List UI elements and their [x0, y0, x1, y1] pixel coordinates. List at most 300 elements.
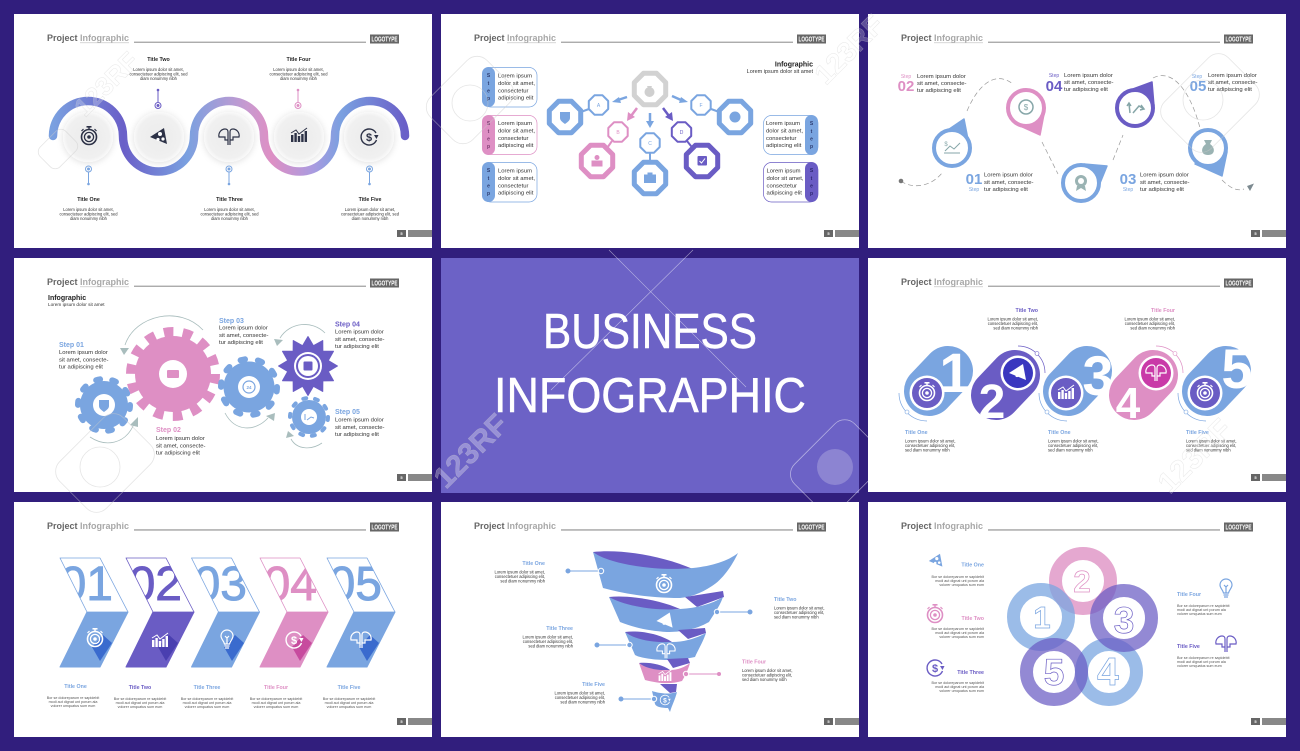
panel: title: [441, 258, 859, 493]
text: title five: volorer umquatus sum eum: [327, 705, 371, 709]
step box 5: Lorem ipsum: [766, 168, 801, 174]
text: title five: Title Five: [1177, 644, 1200, 650]
text: title five: [341, 197, 400, 221]
gear 3: 24: [246, 385, 252, 390]
text: title three: [522, 626, 574, 648]
text: title four: Title Four: [742, 660, 766, 666]
step 01: tur adipiscing elit: [984, 187, 1028, 193]
text: title four: Title Four: [1151, 308, 1175, 314]
panel: pin route: [868, 14, 1286, 248]
text: title four: Lorem ipsum dolor sit amet,: [273, 67, 324, 72]
page number: 5: [400, 719, 403, 724]
text: title one second: consectetuer adipiscing elit,: [1048, 443, 1098, 448]
text: title one: [47, 684, 99, 708]
step 04: Step: [1049, 73, 1059, 79]
text: title four: Title Four: [1177, 592, 1201, 598]
infographic caption: Lorem ipsum dolor sit amet: [48, 302, 105, 307]
text: title three: Title Three: [546, 626, 573, 632]
text: title five: [323, 685, 375, 709]
step 01: 01: [966, 171, 982, 188]
icon: bulb: [1220, 579, 1232, 597]
heading: [474, 33, 793, 43]
text: title three: Title Three: [216, 197, 243, 203]
step box 1: dolor sit amet,: [498, 81, 535, 87]
step box 3: dolor sit amet,: [498, 176, 535, 182]
logotype: LOGOTYPE: [1226, 37, 1252, 44]
step 05: [335, 409, 384, 438]
text: title three: volorer umquatus sum eum: [185, 705, 229, 709]
funnel band 1: [593, 551, 738, 598]
step 05: tur adipiscing elit: [335, 432, 379, 438]
text: title one: sed diam nonummy nibh: [905, 448, 950, 452]
step box 3: consectetur: [498, 184, 528, 190]
step 01: tur adipiscing elit: [59, 364, 103, 370]
logotype: [797, 34, 826, 44]
heading: Project: [474, 33, 505, 43]
panel: wave timeline: [14, 14, 432, 248]
step 02: sit amet, consecte-: [917, 81, 966, 87]
infographic caption: Infographic: [775, 62, 813, 68]
text: title one: diam nonummy nibh: [70, 216, 108, 221]
text: title one: sed diam nonummy nibh: [500, 578, 546, 584]
step box 3: p: [487, 191, 490, 197]
text: title two: Title Two: [962, 616, 985, 622]
text: title five: Bor se doloreparum re sapidebit: [323, 697, 375, 701]
step 01: sit amet, consecte-: [984, 180, 1033, 186]
step 03: Lorem ipsum dolor: [1140, 172, 1189, 178]
step 03: tur adipiscing elit: [1140, 187, 1184, 193]
heading: Infographic: [507, 521, 556, 531]
heading: Infographic: [80, 521, 129, 531]
text: title one: Title One: [905, 430, 928, 436]
capsule 4: [1116, 346, 1183, 428]
step box 5: consectetur: [766, 184, 797, 190]
heading: Infographic: [934, 33, 983, 43]
page number: 5: [1254, 475, 1257, 480]
text: title one: consectetuer adipiscing elit,: [905, 443, 955, 448]
page number: [1251, 230, 1286, 237]
page number: [824, 230, 859, 237]
text: title one: Title One: [77, 197, 100, 203]
ring 4: 4: [1097, 651, 1119, 694]
step box 3: e: [487, 184, 490, 190]
step box 2: e: [487, 136, 490, 142]
step 04: 04: [1046, 78, 1063, 95]
text: title three: volorer umquatus sum eum: [939, 689, 984, 693]
step box 1: adipiscing elit: [498, 96, 534, 102]
step 02: Lorem ipsum dolor: [156, 436, 205, 442]
step 02: sit amet, consecte-: [156, 444, 205, 450]
step box 5: S: [810, 168, 814, 174]
step 01: Lorem ipsum dolor: [984, 172, 1033, 178]
step 01: Lorem ipsum dolor: [59, 350, 108, 356]
icon: dollar: [361, 129, 378, 145]
capsule 3: [1039, 344, 1114, 421]
page number: [397, 474, 432, 481]
step 04: Lorem ipsum dolor: [1064, 73, 1113, 79]
pin 1: $: [944, 142, 948, 148]
connectors: [566, 568, 752, 702]
text: title one: Title One: [522, 561, 545, 567]
text: title five: consectetuer adipiscing elit,: [555, 695, 605, 700]
ring 5: 5: [1044, 652, 1064, 693]
icon: triangle: [929, 554, 942, 567]
funnel band 3: [625, 628, 706, 660]
node C: [634, 133, 666, 194]
capsule 2: 2: [979, 376, 1005, 429]
panel: rings: [868, 502, 1286, 737]
step box 3: S: [487, 168, 491, 174]
step 04: Lorem ipsum dolor: [335, 330, 384, 336]
step box 2: adipiscing elit: [498, 143, 534, 149]
icon: triangle: [150, 128, 167, 144]
step box 3: adipiscing elit: [498, 190, 534, 196]
heading: [474, 521, 793, 531]
text: title five: consectetuer adipiscing elit,: [1186, 443, 1236, 448]
node A: [549, 95, 608, 133]
logotype: LOGOTYPE: [798, 525, 825, 532]
text: title one second: sed diam nonummy nibh: [1048, 448, 1093, 452]
step 05: tur adipiscing elit: [1208, 87, 1252, 93]
text: title four: consectetuer adipiscing elit,: [1125, 321, 1175, 326]
step box 4: e: [810, 136, 813, 142]
text: title three: sed diam nonummy nibh: [528, 644, 574, 648]
capsule 2: [979, 346, 1045, 429]
step 04: [335, 322, 384, 350]
title: INFOGRAPHIC: [494, 369, 806, 423]
text: title one second: [1048, 430, 1099, 452]
step box 4: t: [811, 129, 813, 135]
text: title two: Title Two: [774, 597, 797, 603]
text: title one: volorer umquatus sum eum: [939, 583, 984, 587]
text: title two: modi aut dignat unt porum ala: [935, 631, 985, 635]
step 05: [1190, 73, 1257, 95]
text: title five: [1177, 644, 1229, 668]
page number: [397, 718, 432, 725]
panel: funnel: [441, 502, 859, 737]
step 03: tur adipiscing elit: [219, 340, 263, 346]
step 02: 02: [898, 78, 914, 95]
icon: bars: [291, 128, 307, 142]
text: title two: [114, 685, 166, 709]
text: title four: Title Four: [264, 685, 288, 691]
step 01: [966, 171, 1033, 193]
text: title four: consectetuer adipiscing elit,: [742, 672, 792, 678]
text: title five: Title Five: [338, 685, 360, 691]
step 05: 05: [1190, 78, 1206, 95]
pin 2: [1008, 90, 1044, 135]
icon: heads: [1216, 636, 1236, 652]
gear 5: [290, 398, 328, 436]
heading: Project: [47, 521, 78, 531]
step 02: Step 02: [156, 427, 181, 434]
text: title two: sed diam nonummy nibh: [993, 326, 1039, 330]
text: title two: sed diam nonummy nibh: [774, 614, 819, 620]
text: title four: [1177, 592, 1229, 616]
text: title three: modi aut dignat unt porum ala: [183, 701, 232, 705]
icon: heads: [219, 129, 239, 145]
node F: [691, 95, 751, 133]
logotype: [797, 522, 826, 532]
text: title four: sed diam nonummy nibh: [742, 677, 787, 682]
ring 2: 2: [1073, 564, 1091, 599]
heading: Project: [901, 277, 932, 287]
text: title two: consectetuer adipiscing elit,: [774, 610, 824, 615]
text: title one second: Title One: [1048, 430, 1071, 436]
icon: dollar: $: [932, 663, 938, 675]
step 05: Step: [1192, 74, 1202, 80]
route start dot: [899, 179, 903, 183]
step 01: Step 01: [59, 342, 84, 349]
text: title two: volorer umquatus sum eum: [118, 705, 162, 709]
text: title two: Lorem ipsum dolor sit amet,: [987, 316, 1038, 322]
step box 1: [482, 67, 537, 107]
page number: 5: [1254, 719, 1257, 724]
text: title four: sed diam nonummy nibh: [1130, 326, 1176, 330]
step box 2: t: [488, 129, 490, 135]
gear 1: [78, 379, 130, 431]
logotype: LOGOTYPE: [372, 37, 398, 44]
text: title two: [932, 616, 985, 639]
rotation arrows: [90, 316, 325, 448]
chevron 01: 01: [60, 558, 113, 611]
node C: C: [648, 141, 652, 147]
pin 2: $: [1024, 103, 1029, 112]
chevron 03: [192, 558, 260, 667]
step box 5: dolor sit amet,: [766, 176, 804, 182]
text: title one: Title One: [64, 684, 87, 690]
text: title three: [200, 197, 259, 221]
text: title three: Title Three: [957, 670, 984, 676]
text: title five: sed diam nonummy nibh: [1186, 448, 1231, 452]
icon discs: [63, 112, 394, 162]
ring 4: [1082, 644, 1136, 700]
logotype: LOGOTYPE: [1226, 281, 1252, 288]
text: title one: Bor se doloreparum re sapidebit: [47, 696, 99, 700]
title: BUSINESS: [543, 305, 757, 359]
text: title three: Lorem ipsum dolor sit amet,: [204, 207, 255, 212]
text: title one: consectetuer adipiscing elit, sed: [59, 212, 118, 216]
text: title five: volorer umquatus sum eum: [1177, 664, 1222, 668]
step 03: 03: [1120, 171, 1136, 188]
text: title three: diam nonummy nibh: [211, 216, 249, 221]
text: title one: [494, 561, 546, 584]
gear 2: [131, 332, 215, 416]
step box 2: [482, 115, 537, 155]
node F: F: [699, 103, 703, 109]
page number: 5: [400, 475, 403, 480]
heading: [47, 33, 366, 43]
step box 5: adipiscing elit: [766, 190, 802, 196]
logotype: [1224, 278, 1253, 288]
text: title five: Title Five: [1186, 430, 1209, 436]
step box 4: S: [810, 121, 814, 127]
page number: 5: [827, 719, 830, 724]
step box 3: [482, 162, 537, 202]
chevron 01: [60, 558, 128, 667]
text: title four: Lorem ipsum dolor sit amet,: [742, 668, 793, 673]
panel: capsules: [868, 258, 1286, 492]
gear 4: [278, 336, 338, 396]
text: title four: Title Four: [286, 57, 311, 63]
text: title four: [742, 660, 793, 682]
text: title two: [774, 597, 825, 620]
ring 5: [1026, 644, 1082, 700]
icon: dollar: $: [366, 132, 372, 144]
panel: gears: [14, 258, 432, 492]
text: title four: [1124, 308, 1176, 330]
text: title one: modi aut dignat unt porum ala: [935, 579, 985, 583]
text: title three: consectetuer adipiscing elit, sed: [200, 212, 259, 216]
watermark: 123RF: [808, 9, 890, 90]
step 05: Step 05: [335, 409, 360, 416]
infographic caption: Lorem ipsum dolor sit amet: [747, 69, 813, 75]
step 03: sit amet, consecte-: [219, 333, 268, 339]
infographic caption: [48, 295, 105, 307]
ring 3: 3: [1114, 600, 1134, 641]
logotype: [370, 278, 399, 288]
heading: Project: [47, 277, 78, 287]
text: title three: [932, 670, 985, 693]
text: title two: consectetuer adipiscing elit,: [988, 321, 1038, 326]
text: title three: Bor se doloreparum re sapidebit: [181, 697, 233, 701]
text: title four: volorer umquatus sum eum: [254, 705, 298, 709]
step box 5: p: [810, 191, 813, 197]
funnel band 4: [639, 658, 690, 683]
text: title one: [932, 562, 985, 587]
dashed route: [901, 76, 1244, 190]
icon: dollar: [927, 660, 944, 676]
text: title one: Lorem ipsum dolor sit amet,: [494, 570, 545, 574]
text: title two: Lorem ipsum dolor sit amet,: [774, 606, 825, 610]
step box 2: S: [487, 121, 491, 127]
text: title two: Title Two: [129, 685, 152, 691]
heading: [47, 277, 366, 287]
step 02: [156, 427, 205, 456]
heading: [47, 521, 366, 531]
pin 5: [1190, 130, 1227, 176]
page number: 5: [1254, 231, 1257, 236]
ring 1: 1: [1033, 600, 1051, 635]
icon: stopwatch: [82, 126, 96, 144]
heading: Project: [901, 33, 932, 43]
step 05: Lorem ipsum dolor: [335, 418, 384, 424]
heading: Infographic: [934, 277, 983, 287]
step 04: [1046, 73, 1113, 95]
watermark: 123RF: [428, 408, 515, 495]
text: title one second: Lorem ipsum dolor sit amet,: [1048, 438, 1099, 444]
node B: [581, 122, 628, 177]
text: title four: modi aut dignat unt porum ala: [1177, 608, 1227, 612]
step box 5: e: [810, 184, 813, 190]
text: title one: Title One: [961, 562, 984, 568]
watermark: 123RF: [68, 46, 144, 122]
chevron 04: $: [291, 635, 297, 647]
text: title two: Bor se doloreparum re sapidebit: [114, 697, 166, 701]
text: title two: diam nonummy nibh: [140, 76, 178, 81]
chevron 02: 02: [129, 558, 182, 611]
text: title one: Lorem ipsum dolor sit amet,: [905, 438, 956, 444]
step 02: Lorem ipsum dolor: [917, 74, 966, 80]
text: title three: Title Three: [194, 685, 220, 691]
step 04: tur adipiscing elit: [1064, 87, 1108, 93]
capsule 3: 3: [1082, 344, 1114, 407]
text: title four: modi aut dignat unt porum ala: [252, 701, 301, 705]
route end arrow: [1247, 184, 1254, 191]
heading: [901, 33, 1220, 43]
step 04: tur adipiscing elit: [335, 344, 379, 350]
page number: [397, 230, 432, 237]
step box 2: Lorem ipsum: [498, 121, 532, 127]
text: title two: Bor se doloreparum re sapidebit: [932, 627, 984, 631]
text: title five: Title Five: [582, 682, 605, 688]
text: title four: Bor se doloreparum re sapidebit: [250, 697, 302, 701]
text: title four: Lorem ipsum dolor sit amet,: [1124, 316, 1175, 322]
icon: centre money bag octagon: [634, 73, 666, 105]
text: title one: consectetuer adipiscing elit,: [495, 574, 545, 579]
step 05: sit amet, consecte-: [1208, 80, 1257, 86]
text: title five: Title Five: [359, 197, 381, 203]
heading: Infographic: [80, 277, 129, 287]
capsule 4: 4: [1116, 379, 1141, 428]
heading: Infographic: [507, 33, 556, 43]
arrowheads: [120, 339, 294, 438]
page number: [1251, 474, 1286, 481]
text: title two: consectetuer adipiscing elit, sed: [129, 72, 188, 76]
text: title four: diam nonummy nibh: [280, 76, 318, 81]
panel: chevrons: [14, 502, 432, 737]
text: title four: consectetuer adipiscing elit, sed: [269, 72, 328, 76]
capsule 5: [1178, 337, 1253, 421]
heading: Infographic: [80, 33, 129, 43]
step 02: Step: [901, 74, 911, 80]
node D: [672, 122, 718, 177]
text: title five: sed diam nonummy nibh: [560, 700, 606, 704]
step 02: tur adipiscing elit: [156, 450, 200, 456]
page number: [824, 718, 859, 725]
text: title four: Bor se doloreparum re sapidebit: [1177, 604, 1229, 608]
step box 2: dolor sit amet,: [498, 128, 535, 134]
step 03: [219, 318, 268, 346]
heading: [901, 277, 1220, 287]
panel: octagon tree: [441, 14, 859, 248]
step 02: tur adipiscing elit: [917, 88, 961, 94]
step box 3: t: [488, 176, 490, 182]
chevron 05: 05: [329, 558, 382, 611]
text: title five: Lorem ipsum dolor sit amet,: [1186, 438, 1237, 444]
step 05: sit amet, consecte-: [335, 425, 384, 431]
text: title five: modi aut dignat unt porum ala: [325, 701, 374, 705]
step box 1: t: [488, 81, 490, 87]
watermark: [35, 9, 1265, 519]
step 03: Step: [1123, 187, 1133, 193]
step 03: [1120, 171, 1189, 193]
logotype: [370, 34, 399, 44]
funnel band 2: [609, 591, 724, 632]
step 03: Lorem ipsum dolor: [219, 326, 268, 332]
text: title three: modi aut dignat unt porum ala: [935, 685, 985, 689]
logotype: [1224, 522, 1253, 532]
step 02: [898, 74, 966, 95]
step box 4: adipiscing elit: [766, 143, 802, 149]
text: title four: volorer umquatus sum eum: [1177, 612, 1222, 616]
logotype: LOGOTYPE: [1226, 525, 1252, 532]
text: title three: [181, 685, 233, 709]
pin 4: [1117, 82, 1154, 126]
chevron 02: [126, 558, 194, 667]
step box 4: dolor sit amet,: [766, 128, 803, 134]
funnel band 5: [652, 684, 677, 712]
